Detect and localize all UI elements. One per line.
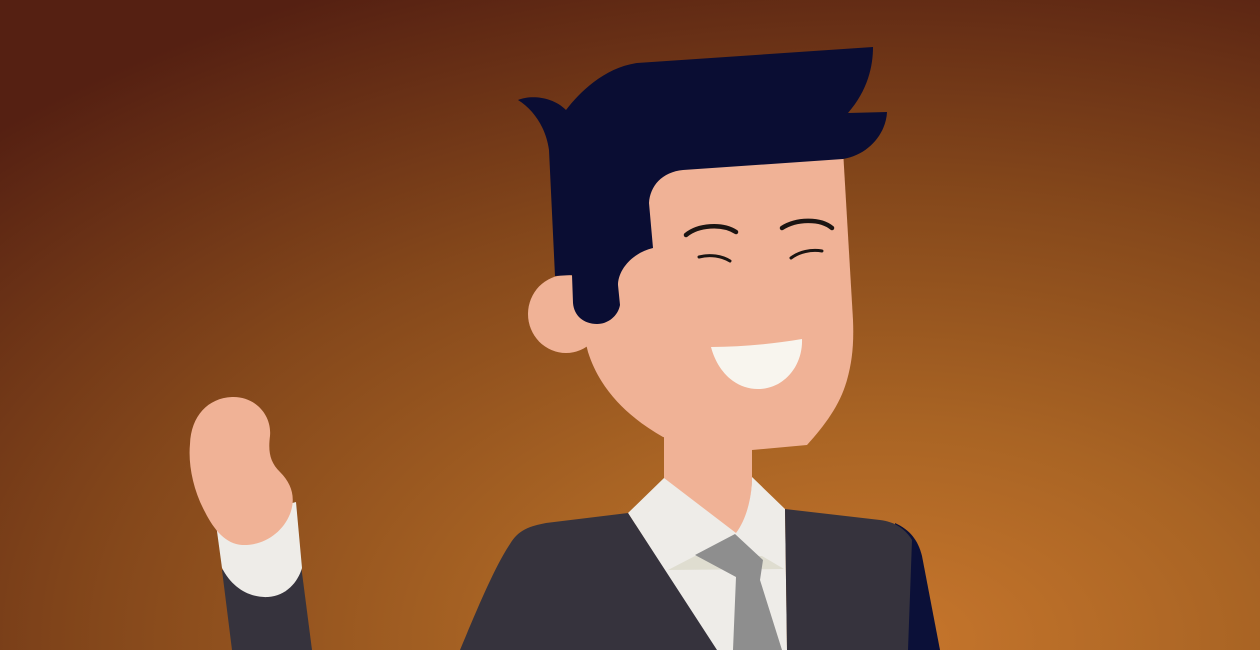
raised arm (190, 397, 312, 650)
shirt (628, 477, 787, 650)
left lower eye line (699, 256, 730, 261)
neck (664, 420, 752, 534)
necktie (695, 534, 782, 650)
head (518, 47, 887, 450)
suit back shoulder (895, 523, 940, 650)
right jacket panel (785, 509, 912, 650)
smile (711, 339, 802, 389)
eyes (686, 221, 832, 261)
hair (518, 47, 887, 324)
ear (528, 275, 604, 353)
right lower eye line (791, 250, 822, 258)
hand (190, 397, 293, 545)
shirt cuff (216, 502, 302, 597)
right upper eye line (782, 221, 832, 228)
left upper eye line (686, 226, 736, 235)
sleeve (222, 565, 312, 650)
collar shadow (668, 556, 784, 570)
face (570, 150, 853, 450)
torso (460, 420, 940, 650)
left jacket panel (460, 513, 717, 650)
